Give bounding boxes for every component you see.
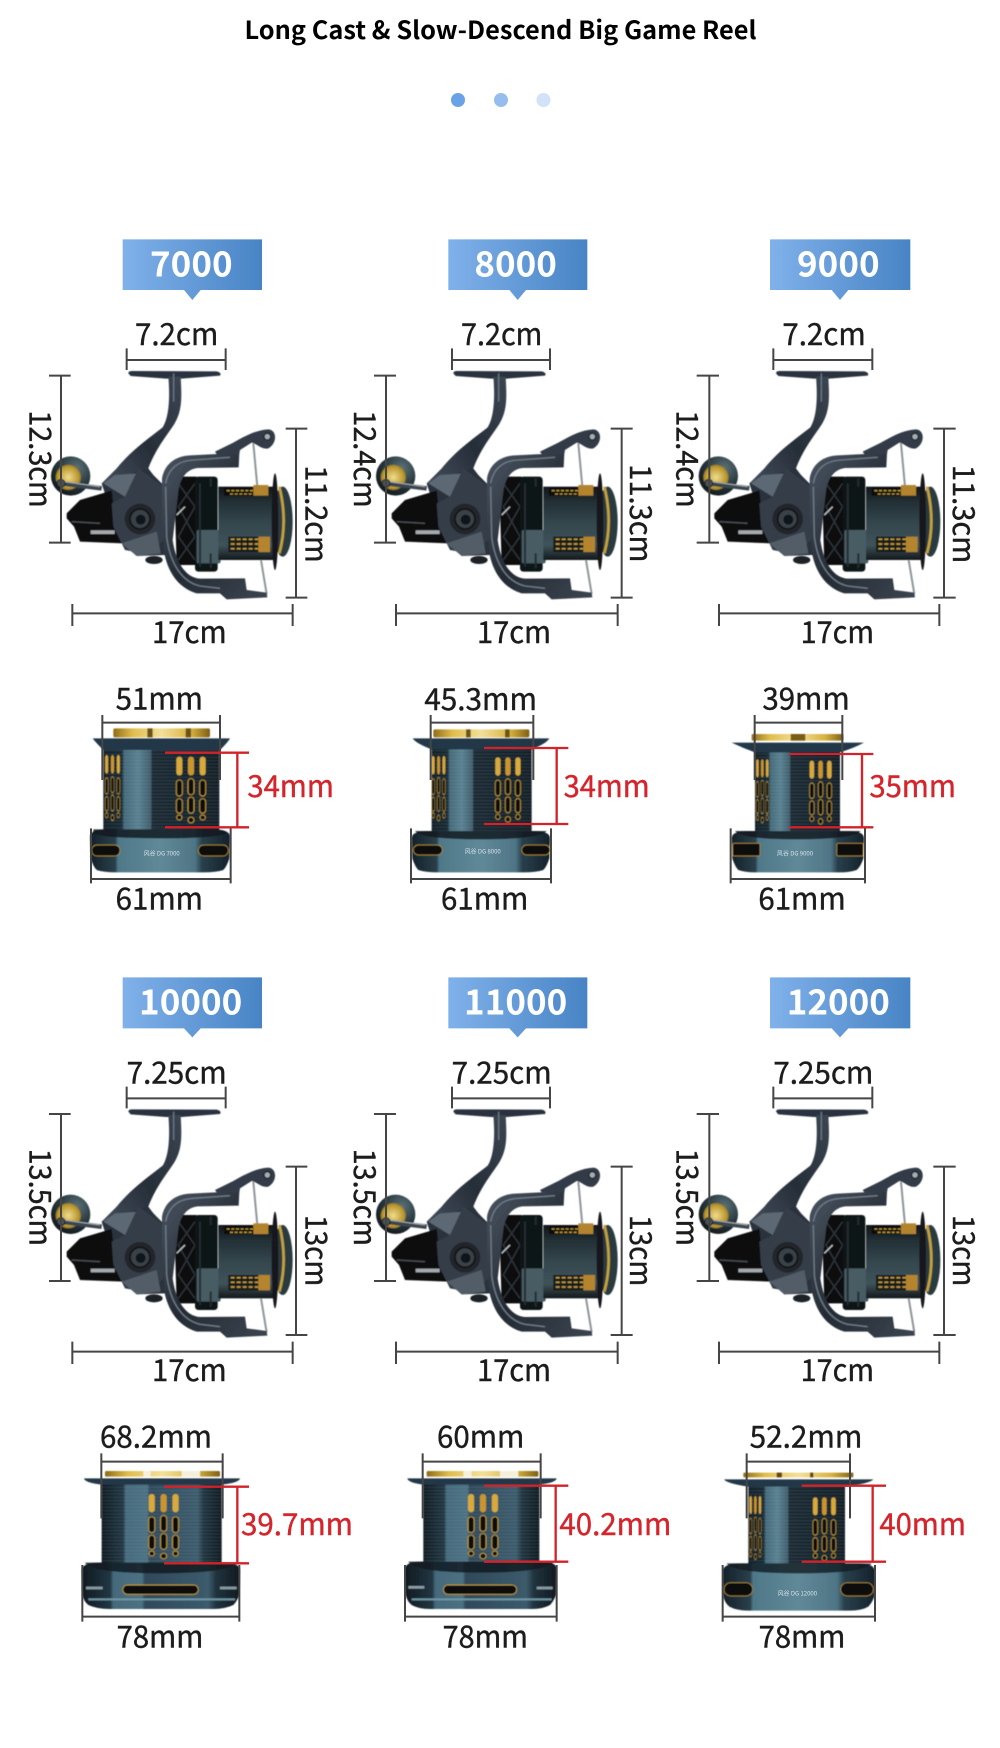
- dimension: length 17cm: [719, 604, 939, 652]
- spool label: 风谷 DG 12000: [778, 1588, 818, 1597]
- dimension: red 35mm: [789, 754, 956, 827]
- dimension: height 11.2cm: 11.2cm: [297, 465, 341, 563]
- dimension: red 34mm: [484, 748, 650, 824]
- dimension: base 61mm: [731, 828, 865, 918]
- dimension: top 51mm: [102, 674, 220, 780]
- dimension: red 34mm: 34mm: [564, 762, 650, 806]
- model tag: 11000: 11000: [464, 974, 567, 1025]
- model tag: 10000: [123, 974, 262, 1037]
- panel: 7000 reel: [20, 237, 341, 652]
- dimension: spool top 7.2cm: [452, 310, 550, 370]
- dimension: base 78mm: [405, 1565, 557, 1656]
- model tag: 9000: 9000: [797, 237, 880, 288]
- dimension: top 39mm: 39mm: [762, 674, 850, 718]
- dimension: red 39.7mm: [164, 1487, 353, 1563]
- spool photo: [82, 1471, 240, 1609]
- model tag: 7000: 7000: [150, 237, 233, 288]
- dimension: base 61mm: 61mm: [116, 874, 203, 918]
- dimension: height 12.4cm: [668, 376, 719, 543]
- dimension: top 39mm: [755, 674, 850, 780]
- dimension: base 61mm: [91, 828, 231, 918]
- dimension: top 52.2mm: [747, 1412, 862, 1518]
- spool photo: [90, 728, 230, 872]
- dimension: height 13cm: 13cm: [297, 1215, 341, 1286]
- panel: 12000 reel: [668, 974, 988, 1390]
- model tag: 11000: [448, 974, 587, 1037]
- dimension: base 78mm: [82, 1565, 239, 1656]
- dimension: length 17cm: [72, 1342, 293, 1390]
- dimension: height 13cm: [611, 1167, 665, 1335]
- dimension: height 13.5cm: 13.5cm: [668, 1149, 712, 1246]
- dimension: spool top 7.2cm: 7.2cm: [461, 310, 542, 354]
- dimension: red 40mm: 40mm: [879, 1500, 966, 1544]
- dimension: height 11.3cm: 11.3cm: [621, 464, 665, 562]
- dimension: spool top 7.2cm: 7.2cm: [135, 310, 218, 354]
- dimension: base 61mm: 61mm: [758, 874, 846, 918]
- dimension: red 34mm: 34mm: [247, 762, 334, 806]
- dimension: length 17cm: [396, 1342, 618, 1390]
- dimension: height 12.4cm: 12.4cm: [668, 410, 712, 508]
- panel: 10000 reel: [20, 974, 341, 1390]
- model tag: 12000: 12000: [787, 974, 890, 1025]
- dimension: height 13.5cm: [20, 1114, 71, 1281]
- dimension: height 13cm: [286, 1167, 341, 1335]
- panel: 10000 spool: [82, 1412, 353, 1656]
- dimension: spool top 7.25cm: 7.25cm: [773, 1048, 873, 1092]
- spool label: 风谷 DG 7000: [144, 848, 180, 857]
- dimension: height 11.3cm: 11.3cm: [944, 465, 988, 563]
- dimension: height 13cm: 13cm: [621, 1215, 665, 1286]
- dimension: height 11.3cm: [933, 429, 988, 598]
- dimension: top 60mm: [423, 1412, 541, 1518]
- spool photo: [732, 734, 864, 872]
- dimension: height 12.3cm: 12.3cm: [20, 410, 64, 508]
- dimension: base 78mm: 78mm: [443, 1612, 528, 1656]
- dimension: top 45.3mm: 45.3mm: [424, 675, 537, 719]
- dimension: length 17cm: [396, 604, 618, 652]
- dimension: top 51mm: 51mm: [116, 674, 203, 718]
- dimension: top 68.2mm: [100, 1412, 223, 1518]
- dimension: length 17cm: 17cm: [477, 1346, 551, 1390]
- dimension: height 13.5cm: [345, 1114, 396, 1281]
- dimension: spool top 7.25cm: 7.25cm: [452, 1048, 552, 1092]
- dimension: spool top 7.2cm: [127, 310, 226, 370]
- panel: 8000 spool: [411, 675, 650, 918]
- dimension: length 17cm: 17cm: [152, 1346, 227, 1390]
- panel: 11000 reel: [345, 974, 665, 1390]
- dimension: length 17cm: [719, 1342, 939, 1390]
- reel photo: [699, 1109, 940, 1338]
- spool photo: [723, 1473, 875, 1611]
- reel photo: [699, 371, 940, 599]
- dimension: height 12.3cm: [20, 376, 71, 543]
- dimension: red 40.2mm: 40.2mm: [559, 1500, 671, 1544]
- dimension: height 11.2cm: [286, 429, 341, 598]
- dimension: red 35mm: 35mm: [869, 762, 956, 806]
- model tag: 7000: [123, 237, 262, 300]
- spool photo: [412, 729, 550, 872]
- dimension: top 68.2mm: 68.2mm: [100, 1412, 212, 1456]
- dimension: spool top 7.2cm: 7.2cm: [782, 310, 866, 354]
- dimension: base 78mm: 78mm: [117, 1612, 203, 1656]
- dimension: top 52.2mm: 52.2mm: [750, 1412, 862, 1456]
- panel: 11000 spool: [405, 1412, 671, 1656]
- model tag: 12000: [770, 974, 910, 1037]
- panel: 9000 reel: [668, 237, 988, 652]
- dimension: length 17cm: [72, 604, 293, 652]
- reel photo: [51, 371, 293, 599]
- reel photo: [376, 1109, 618, 1338]
- dimension: red 34mm: [165, 753, 334, 827]
- dimension: height 13.5cm: [668, 1114, 719, 1281]
- pagination dots: [451, 93, 550, 107]
- dimension: height 13.5cm: 13.5cm: [20, 1149, 64, 1246]
- panel: 12000 spool: [723, 1412, 966, 1656]
- panel: 7000 spool: [90, 674, 334, 918]
- dimension: height 13cm: [933, 1167, 988, 1335]
- dimension: height 13.5cm: 13.5cm: [345, 1149, 389, 1246]
- model tag: 8000: 8000: [474, 237, 557, 288]
- reel photo: [376, 371, 618, 599]
- dimension: base 78mm: 78mm: [759, 1612, 845, 1656]
- dimension: length 17cm: 17cm: [152, 608, 227, 652]
- dimension: red 40mm: [802, 1486, 966, 1562]
- title: Long Cast & Slow-Descend Big Game Reel: [244, 11, 757, 47]
- spool label: 风谷 DG 9000: [777, 848, 814, 857]
- spool photo: [405, 1471, 557, 1609]
- dimension: height 12.4cm: [345, 376, 396, 543]
- dimension: red 39.7mm: 39.7mm: [241, 1500, 353, 1544]
- dimension: base 61mm: 61mm: [441, 874, 528, 918]
- panel: 9000 spool: [731, 674, 956, 918]
- model tag: 9000: [770, 237, 910, 300]
- dimension: height 13cm: 13cm: [944, 1215, 988, 1286]
- reel photo: [51, 1109, 293, 1338]
- spool label: 风谷 DG 8000: [465, 847, 501, 856]
- model tag: 8000: [448, 237, 587, 300]
- dimension: length 17cm: 17cm: [801, 1346, 874, 1390]
- dimension: length 17cm: 17cm: [801, 608, 874, 652]
- dimension: length 17cm: 17cm: [477, 608, 551, 652]
- dimension: base 61mm: [411, 828, 551, 918]
- dimension: height 12.4cm: 12.4cm: [345, 410, 389, 508]
- dimension: red 40.2mm: [484, 1486, 671, 1562]
- dimension: spool top 7.25cm: 7.25cm: [127, 1048, 227, 1092]
- dimension: top 45.3mm: [424, 675, 537, 780]
- dimension: top 60mm: 60mm: [437, 1412, 524, 1456]
- panel: 8000 reel: [345, 237, 665, 652]
- model tag: 10000: 10000: [139, 974, 242, 1025]
- dimension: base 78mm: [723, 1565, 875, 1656]
- dimension: spool top 7.2cm: [773, 310, 872, 370]
- dimension: height 11.3cm: [611, 429, 665, 598]
